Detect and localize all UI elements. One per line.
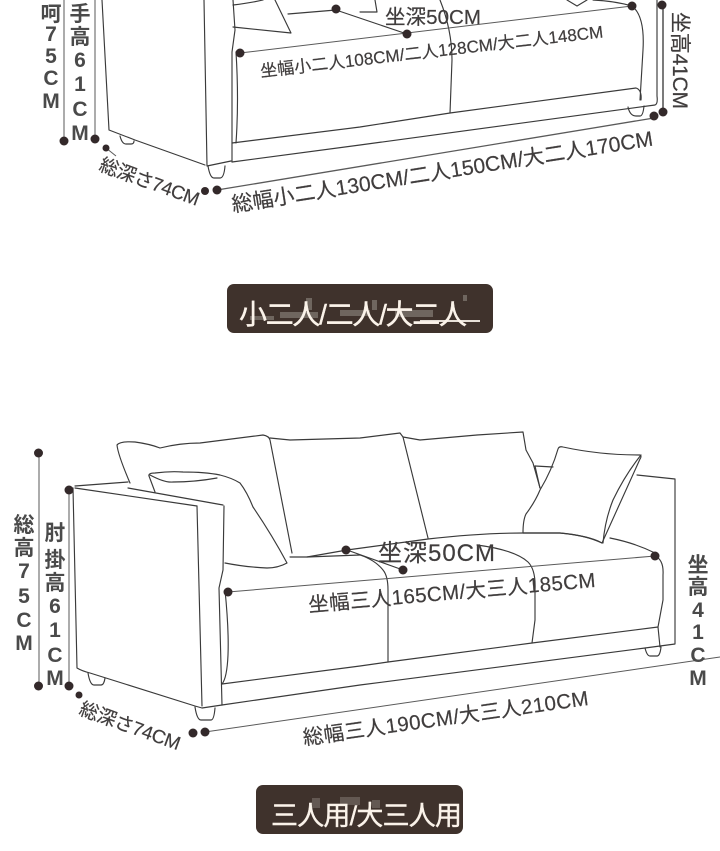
dimension lines: three-seater — [39, 453, 720, 732]
sofa line drawing: three-seater — [73, 432, 675, 720]
vertical label: arm height 61cm: 1 — [74, 73, 86, 96]
vertical label: total height 75cm: 高 — [14, 537, 34, 560]
badge: three-seater sizes — [256, 785, 463, 834]
badge: two-seater sizes — [227, 284, 493, 333]
dimension lines: two-seater — [64, 0, 663, 190]
vertical label: total height 75cm: 総 — [14, 514, 34, 537]
vertical label: total height 75cm — [40, 3, 62, 113]
label: seat depth 50cm: 坐深50CM — [385, 6, 481, 29]
vertical label: total height 75cm: 7 — [45, 23, 57, 46]
measurement dots: three-seater — [34, 448, 660, 738]
label: total depth 74cm: 総深さ74CM — [96, 154, 202, 211]
vertical label: arm height 61cm: 6 — [74, 49, 86, 72]
label: total depth 74cm: 総深さ74CM — [76, 698, 183, 755]
label: seat height 41cm: 坐高41CM — [668, 12, 691, 109]
vertical label: arm height 61cm: 肘 — [44, 522, 66, 545]
badge: three-seater sizes: 三人用/大三人用 — [271, 801, 462, 831]
vertical label: arm height 61cm — [70, 3, 90, 145]
vertical label: arm height 61cm: C — [47, 644, 63, 667]
label: total width: 総幅小二人130CM/二人150CM/大二人170CM — [230, 128, 655, 217]
measurement dots: two-seater — [60, 0, 668, 195]
vertical label: seat height 41cm — [688, 554, 708, 690]
vertical label: total height 75cm: C — [16, 609, 32, 632]
vertical label: arm height 61cm: 1 — [49, 619, 61, 642]
vertical label: total height 75cm: 5 — [18, 585, 30, 608]
label: seat width: 坐幅三人165CM/大三人185CM — [307, 569, 596, 617]
vertical label: total height 75cm: 呵 — [40, 3, 62, 26]
vertical label: seat height 41cm: 4 — [692, 599, 704, 622]
badge: two-seater sizes: 小二人/二人/大二人 — [239, 299, 467, 330]
vertical label: arm height 61cm: M — [71, 122, 89, 145]
panel: two-seater sofa diagram — [40, 0, 691, 217]
vertical label: arm height 61cm: M — [46, 667, 64, 690]
label: seat depth 50cm: 坐深50CM — [378, 540, 495, 567]
vertical label: arm height 61cm — [44, 522, 66, 690]
vertical label: total height 75cm: 7 — [18, 560, 30, 583]
vertical label: arm height 61cm: 掛 — [44, 549, 66, 572]
vertical label: total height 75cm: M — [15, 632, 33, 655]
vertical label: total height 75cm: C — [43, 67, 59, 90]
vertical label: total height 75cm — [14, 514, 34, 655]
vertical label: total height 75cm: 5 — [45, 45, 57, 68]
vertical label: seat height 41cm: C — [690, 644, 706, 667]
vertical label: arm height 61cm: 高 — [44, 572, 66, 595]
label: total width: 総幅三人190CM/大三人210CM — [301, 687, 590, 750]
vertical label: total height 75cm: M — [42, 90, 60, 113]
label: seat width: 坐幅小二人108CM/二人128CM/大二人148CM — [259, 22, 604, 81]
vertical label: arm height 61cm: C — [72, 98, 88, 121]
vertical label: arm height 61cm: 高 — [70, 26, 90, 49]
vertical label: arm height 61cm: 手 — [70, 3, 90, 26]
sofa line drawing: two-seater — [102, 0, 657, 178]
panel: three-seater sofa diagram — [14, 432, 720, 755]
vertical label: arm height 61cm: 6 — [49, 595, 61, 618]
vertical label: seat height 41cm: 坐 — [688, 554, 708, 577]
vertical label: seat height 41cm: 高 — [688, 576, 708, 599]
vertical label: seat height 41cm: 1 — [692, 621, 704, 644]
vertical label: seat height 41cm: M — [689, 667, 707, 690]
